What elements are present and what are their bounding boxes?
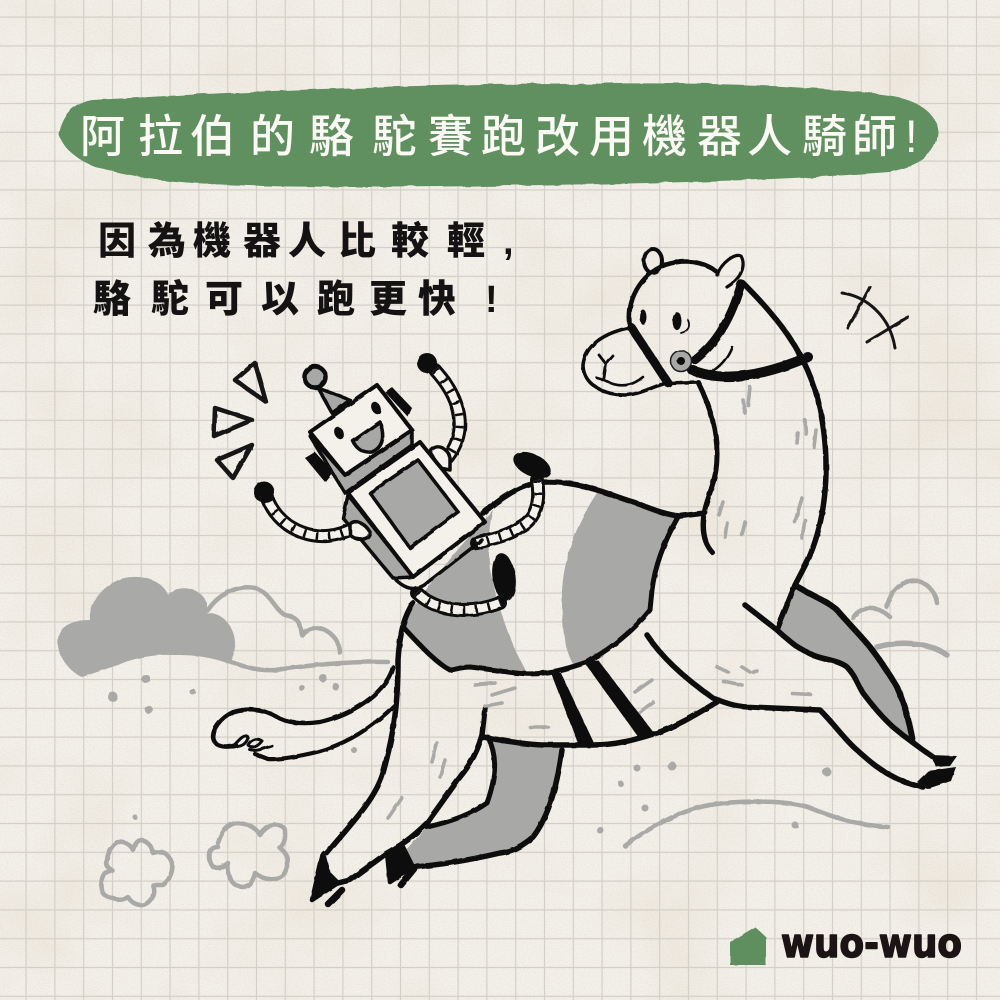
girth strap right [584, 660, 654, 738]
logo wordmark: wuo-wuo [781, 921, 962, 967]
throat mark [714, 347, 732, 370]
lower ground line [625, 802, 888, 846]
nose [599, 355, 613, 378]
blanket left band [403, 510, 527, 673]
left ear [644, 249, 662, 273]
far hoof [387, 847, 413, 882]
far leg outer edge [413, 750, 562, 867]
robot lower body trim [396, 540, 482, 589]
robot right eye [369, 400, 383, 416]
robot head top [310, 385, 412, 475]
halter nose band [631, 327, 668, 383]
background scenery [58, 577, 947, 905]
robot body [348, 442, 485, 577]
eyes [640, 310, 646, 324]
front hoof upper [931, 755, 957, 767]
title text: 阿拉伯的駱駝賽跑改用機器人騎師! [80, 111, 918, 162]
robot shoulder joint [430, 447, 450, 470]
blanket centre band [562, 493, 678, 664]
cheek mark [681, 320, 689, 333]
robot lower hand [489, 552, 519, 602]
robot mouth [353, 422, 383, 452]
robot upper hand [417, 353, 437, 373]
robot rear arm [477, 480, 538, 543]
front hoof lower [917, 767, 956, 789]
far toe [401, 869, 414, 885]
neck front [698, 382, 717, 553]
brand logo [730, 921, 962, 967]
camel fur marks [388, 387, 816, 818]
robot screen [370, 460, 458, 548]
robot antenna ball [304, 366, 326, 388]
mouth [597, 377, 643, 385]
robot lower arm [417, 593, 500, 610]
robot left hand [254, 482, 274, 502]
excitement triangles [214, 363, 266, 478]
near hind leg right [338, 708, 485, 883]
robot head side [310, 430, 412, 493]
far front leg bottom edge [745, 605, 933, 757]
camel gray fills [403, 493, 913, 867]
right ear [717, 255, 743, 287]
halter neck strap [695, 284, 741, 360]
near toe [328, 890, 342, 904]
neck back [743, 283, 826, 630]
muzzle [583, 328, 698, 395]
triangle top [235, 363, 266, 402]
logo house icon [730, 927, 766, 965]
robot neck cone [318, 388, 350, 413]
far hind leg fill [403, 737, 562, 867]
scratch mark near camel [842, 287, 908, 348]
robot upper arm [435, 370, 460, 457]
triangle bottom [217, 445, 252, 478]
halter lead strap [692, 357, 808, 377]
tail tuft [232, 736, 272, 751]
subtitle line 1: 因為機器人比較輕, [98, 221, 514, 263]
near hoof [312, 853, 338, 900]
robot arm cuffs [350, 522, 370, 539]
robot left arm [268, 500, 355, 536]
robot left ear [305, 452, 333, 482]
small cloud left [101, 840, 172, 905]
outline cloud [208, 587, 340, 653]
ground line left [227, 660, 388, 670]
banner background [59, 83, 938, 187]
right outline cloud [853, 581, 937, 618]
far front leg top edge [798, 587, 913, 742]
back [483, 482, 705, 516]
tail upper [213, 667, 393, 747]
right ground line [877, 643, 947, 655]
robot jockey [254, 353, 555, 610]
far front leg fill [777, 587, 913, 742]
tail lower [255, 705, 395, 759]
belly [483, 702, 717, 745]
robot rear hand [509, 447, 555, 483]
title banner [59, 83, 938, 187]
girth strap left [551, 673, 594, 746]
blanket edge [403, 517, 678, 674]
subtitle text [93, 221, 514, 321]
dark cloud [58, 577, 235, 677]
subtitle line 2: 駱駝可以跑更快! [93, 279, 498, 321]
rump and near hind leg left [327, 603, 413, 853]
far leg inner edge [427, 737, 495, 827]
robot right ear [385, 387, 412, 417]
triangle middle [214, 408, 252, 436]
chest to front leg [647, 635, 923, 787]
head outline [629, 261, 717, 327]
halter ring [670, 350, 692, 372]
robot left eye [332, 425, 346, 441]
ground dots [108, 674, 832, 834]
robot body side [343, 495, 413, 578]
camel [213, 249, 957, 904]
small cloud right [209, 823, 288, 887]
